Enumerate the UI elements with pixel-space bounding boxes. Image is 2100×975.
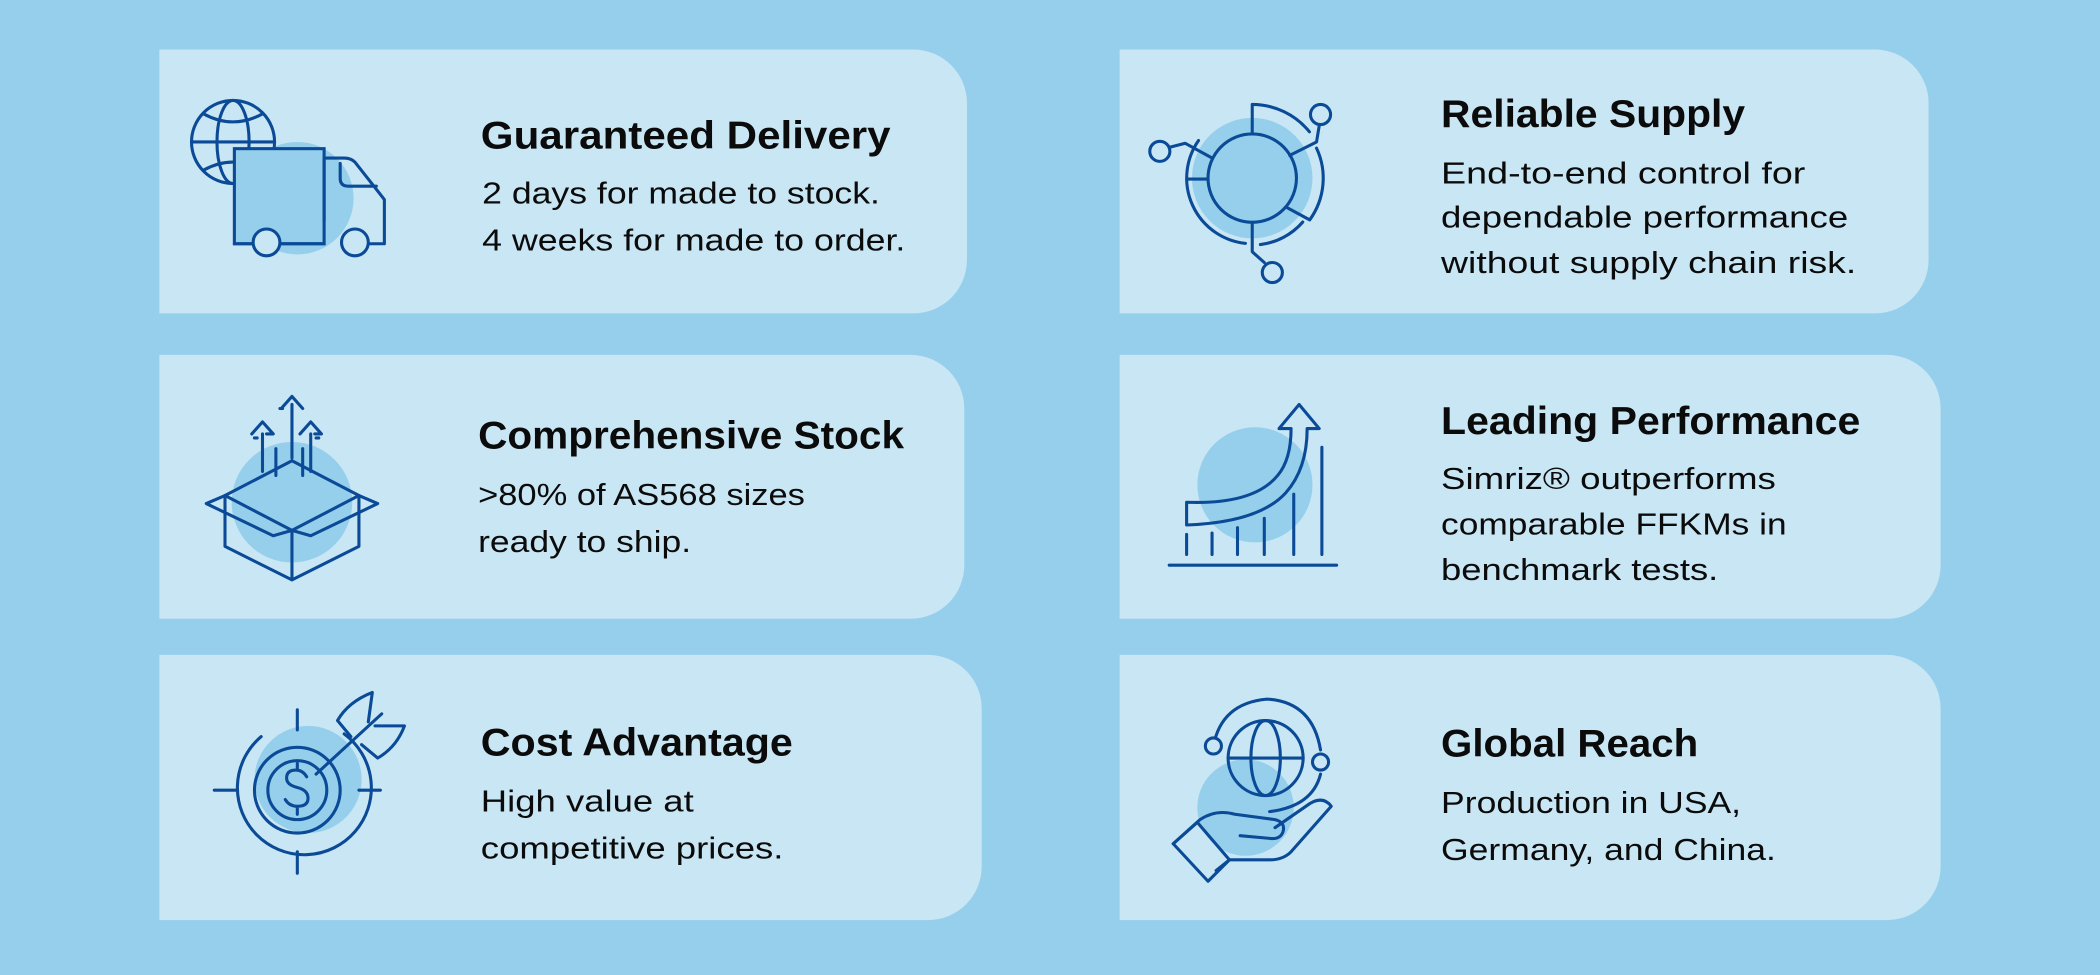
panel: cost advantage	[159, 655, 982, 920]
title: Global Reach	[1441, 723, 1698, 766]
title: Leading Performance	[1441, 400, 1860, 443]
title: Cost Advantage	[481, 721, 793, 764]
panel: reliable supply	[1120, 50, 1929, 313]
text block: Production in USA,	[1441, 785, 1741, 820]
panel: global reach	[1120, 655, 1941, 920]
text block	[1441, 785, 1776, 867]
text block	[1441, 461, 1787, 587]
text block: End-to-end control for	[1441, 155, 1805, 190]
text block: competitive prices.	[481, 830, 783, 865]
icon: globe and truck	[192, 100, 384, 256]
text block	[481, 784, 783, 865]
text block: 2 days for made to stock.	[482, 176, 880, 211]
panel: guaranteed delivery	[159, 50, 967, 313]
icon: target with dollar and dart	[214, 692, 404, 873]
title: Reliable Supply	[1441, 93, 1745, 136]
text block: >80% of AS568 sizes	[478, 477, 805, 512]
icon: box with arrows	[206, 396, 378, 580]
text block: without supply chain risk.	[1440, 245, 1856, 280]
icon: hand with globe	[1173, 699, 1331, 881]
text block: comparable FFKMs in	[1441, 506, 1787, 541]
text block: Simriz® outperforms	[1441, 461, 1776, 496]
text block	[482, 176, 905, 257]
text block: benchmark tests.	[1441, 552, 1718, 587]
text block: Germany, and China.	[1441, 832, 1776, 867]
text block	[1440, 155, 1856, 280]
title: Comprehensive Stock	[478, 415, 904, 458]
text block	[478, 477, 805, 559]
title: Guaranteed Delivery	[481, 115, 891, 158]
text block: dependable performance	[1441, 200, 1848, 235]
text block: ready to ship.	[478, 524, 691, 559]
icon: supply network	[1150, 104, 1331, 283]
text block: 4 weeks for made to order.	[482, 222, 905, 257]
icon: growth chart	[1169, 404, 1337, 565]
text block: High value at	[481, 784, 694, 819]
panel: leading performance	[1120, 355, 1941, 619]
panel: comprehensive stock	[159, 355, 964, 619]
